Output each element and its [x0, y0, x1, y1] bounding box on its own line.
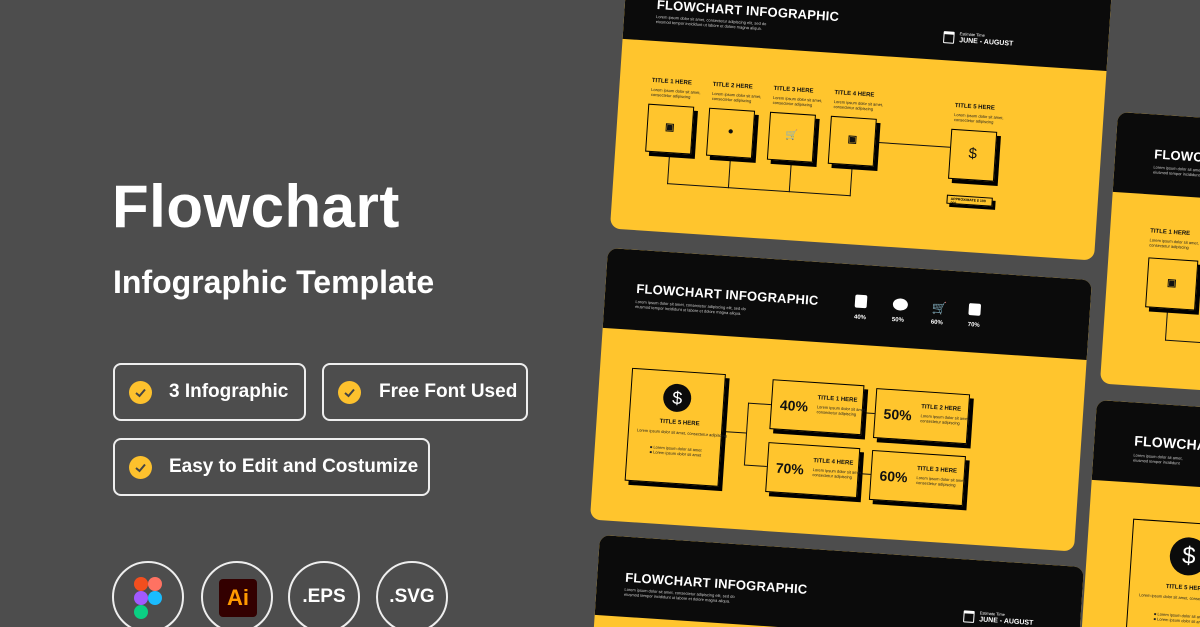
panel: card 1 top: Lorem ipsum dolor sit amet,	[773, 95, 822, 103]
panel: card 2 middle: TITLE 3 HERE	[917, 466, 957, 475]
panel: card 2 middle: 🛒	[931, 301, 947, 316]
panel: card 3 bottom: Estimate Time	[980, 610, 1005, 617]
panel: card 2 middle: ■ Lorem ipsum dolor sit amet	[649, 449, 701, 458]
icon: Ai: Ai	[227, 585, 249, 610]
panel: card right bottom: Lorem ipsum dolor sit amet,	[1133, 453, 1183, 461]
panel: card 1 top: JUNE - AUGUST	[959, 37, 1014, 48]
panel: card 1 top: consectetur adipiscing	[712, 96, 751, 103]
panel: card 1 top: TITLE 1 HERE	[652, 78, 692, 86]
badge: Free Font Used	[322, 363, 528, 421]
panel: card 1 top: APPROXIMATE $ 100 000	[950, 197, 986, 205]
panel: card 1 top: Lorem ipsum dolor sit amet,	[834, 99, 883, 107]
panel: card 1 top: $	[968, 145, 977, 163]
panel: card 1 top: ▣	[847, 134, 857, 146]
panel: card 2 middle: Lorem ipsum dolor sit amet,	[817, 404, 866, 412]
panel: card 2 middle: $	[672, 388, 683, 408]
panel: card 2 middle: consectetur adipiscing	[920, 418, 960, 426]
panel: card 3 bottom: eiusmod tempor incididunt ut labore et dolore magna aliqua.	[624, 592, 730, 604]
panel: card right top: TITLE 1 HERE	[1150, 228, 1190, 237]
panel: card 1 top: ●	[727, 126, 734, 137]
panel: card 2 middle: 70%	[967, 322, 980, 329]
icon: SVG: .SVG	[389, 586, 435, 607]
badge: Easy to Edit: Easy to Edit and Costumize	[169, 456, 418, 477]
panel: card right top	[1100, 112, 1200, 391]
panel: card 1 top: consectetur adipiscing	[954, 117, 994, 125]
panel: card 2 middle: TITLE 1 HERE	[817, 395, 858, 404]
panel: card 2 middle: consectetur adipiscing	[916, 480, 956, 488]
panel: card 3 bottom	[592, 535, 1084, 627]
badge: Free Font Used: Free Font Used	[379, 381, 517, 402]
badge: 3 Infographic: 3 Infographic	[169, 381, 288, 402]
panel: card 2 middle: 50%	[892, 317, 904, 324]
panel: card 2 middle: Lorem ipsum dolor sit amet,	[813, 467, 862, 475]
panel: card right top: ▣	[1167, 278, 1177, 289]
icon: EPS	[288, 561, 360, 627]
panel: card 1 top: Lorem ipsum dolor sit amet, consectetur adipiscing elit, sed do	[656, 14, 767, 26]
panel: card 2 middle: consectetur adipiscing	[816, 409, 856, 417]
icon: EPS: .EPS	[302, 586, 346, 607]
icon: Ai	[201, 561, 273, 627]
panel: card right bottom: $	[1181, 542, 1196, 570]
panel: card right bottom: eiusmod tempor incididunt	[1133, 458, 1180, 466]
panel: card 1 top: eiusmod tempor incididunt ut labore et dolore magna aliqua.	[656, 19, 762, 31]
panel: card 2 middle: Lorem ipsum dolor sit amet,	[916, 475, 966, 483]
panel: card 1 top: 🛒	[785, 130, 798, 142]
panel: card 2 middle: consectetur adipiscing	[812, 472, 852, 480]
panel: card 1 top: Estimate Time	[959, 31, 985, 38]
panel: card 3 bottom: Lorem ipsum dolor sit amet, consectetur adipiscing elit, sed do	[624, 587, 735, 599]
panel: card 2 middle: 60%	[879, 468, 908, 485]
panel: card 1 top: Lorem ipsum dolor sit amet,	[954, 112, 1004, 120]
subtitle: Infographic Template	[113, 264, 434, 300]
panel: card 1 top: Lorem ipsum dolor sit amet,	[712, 91, 762, 99]
panel: card 3 bottom: JUNE - AUGUST	[979, 616, 1034, 627]
panel: card right bottom	[1081, 400, 1200, 627]
panel: card 2 middle: 70%	[775, 460, 804, 477]
panel: card 1 top: consectetur adipiscing	[833, 104, 873, 112]
panel: card 1 top: TITLE 2 HERE	[713, 82, 753, 91]
panel: card 2 middle: TITLE 5 HERE	[659, 419, 700, 427]
panel: card 2 middle: eiusmod tempor incididunt ut labore et dolore magna aliqua.	[635, 304, 741, 316]
panel: card 2 middle: FLOWCHART INFOGRAPHIC	[636, 281, 819, 308]
panel: card 2 middle	[590, 248, 1092, 552]
panel: card 2 middle: 40%	[779, 397, 808, 415]
panel: card 2 middle: TITLE 2 HERE	[921, 404, 961, 413]
panel: card 1 top: ▣	[665, 122, 675, 133]
panel: card 1 top: consectetur adipiscing	[773, 100, 812, 108]
panel: card 1 top: TITLE 4 HERE	[834, 90, 875, 99]
panel: card 2 middle: Lorem ipsum dolor sit amet, consectetur adipiscing	[637, 427, 727, 438]
title: Flowchart	[112, 173, 400, 240]
panel: card 2 middle: 60%	[931, 320, 943, 326]
panel: card 2 middle: Lorem ipsum dolor sit amet, consectetur adipiscing elit, sed do	[635, 299, 746, 311]
panel: card 1 top: consectetur adipiscing	[651, 92, 691, 99]
panel: card 1 top: Lorem ipsum dolor sit amet,	[651, 87, 701, 95]
panel: card 1 top: TITLE 3 HERE	[773, 86, 814, 95]
panel: card right top: consectetur adipiscing	[1149, 242, 1189, 250]
panel: card 2 middle: 50%	[883, 406, 912, 423]
badge: Easy to Edit	[113, 438, 430, 496]
panel: card right top: eiusmod tempor incididunt	[1153, 169, 1200, 178]
panel: card 2 middle: TITLE 4 HERE	[813, 458, 853, 467]
panel: card 1 top: TITLE 5 HERE	[955, 103, 995, 112]
panel: card 2 middle: ■ Lorem ipsum dolor sit amet	[650, 444, 702, 453]
panel: card right top: Lorem ipsum dolor sit amet,	[1149, 237, 1199, 246]
icon: figma	[112, 561, 184, 627]
panel: card 3 bottom: FLOWCHART INFOGRAPHIC	[625, 570, 808, 597]
panel: card 1 top	[610, 0, 1112, 261]
panel: card 2 middle: 40%	[854, 314, 866, 321]
panel: card 2 middle: Lorem ipsum dolor sit amet,	[920, 413, 970, 421]
badge: 3 Infographic	[113, 363, 306, 421]
icon: SVG	[376, 561, 448, 627]
